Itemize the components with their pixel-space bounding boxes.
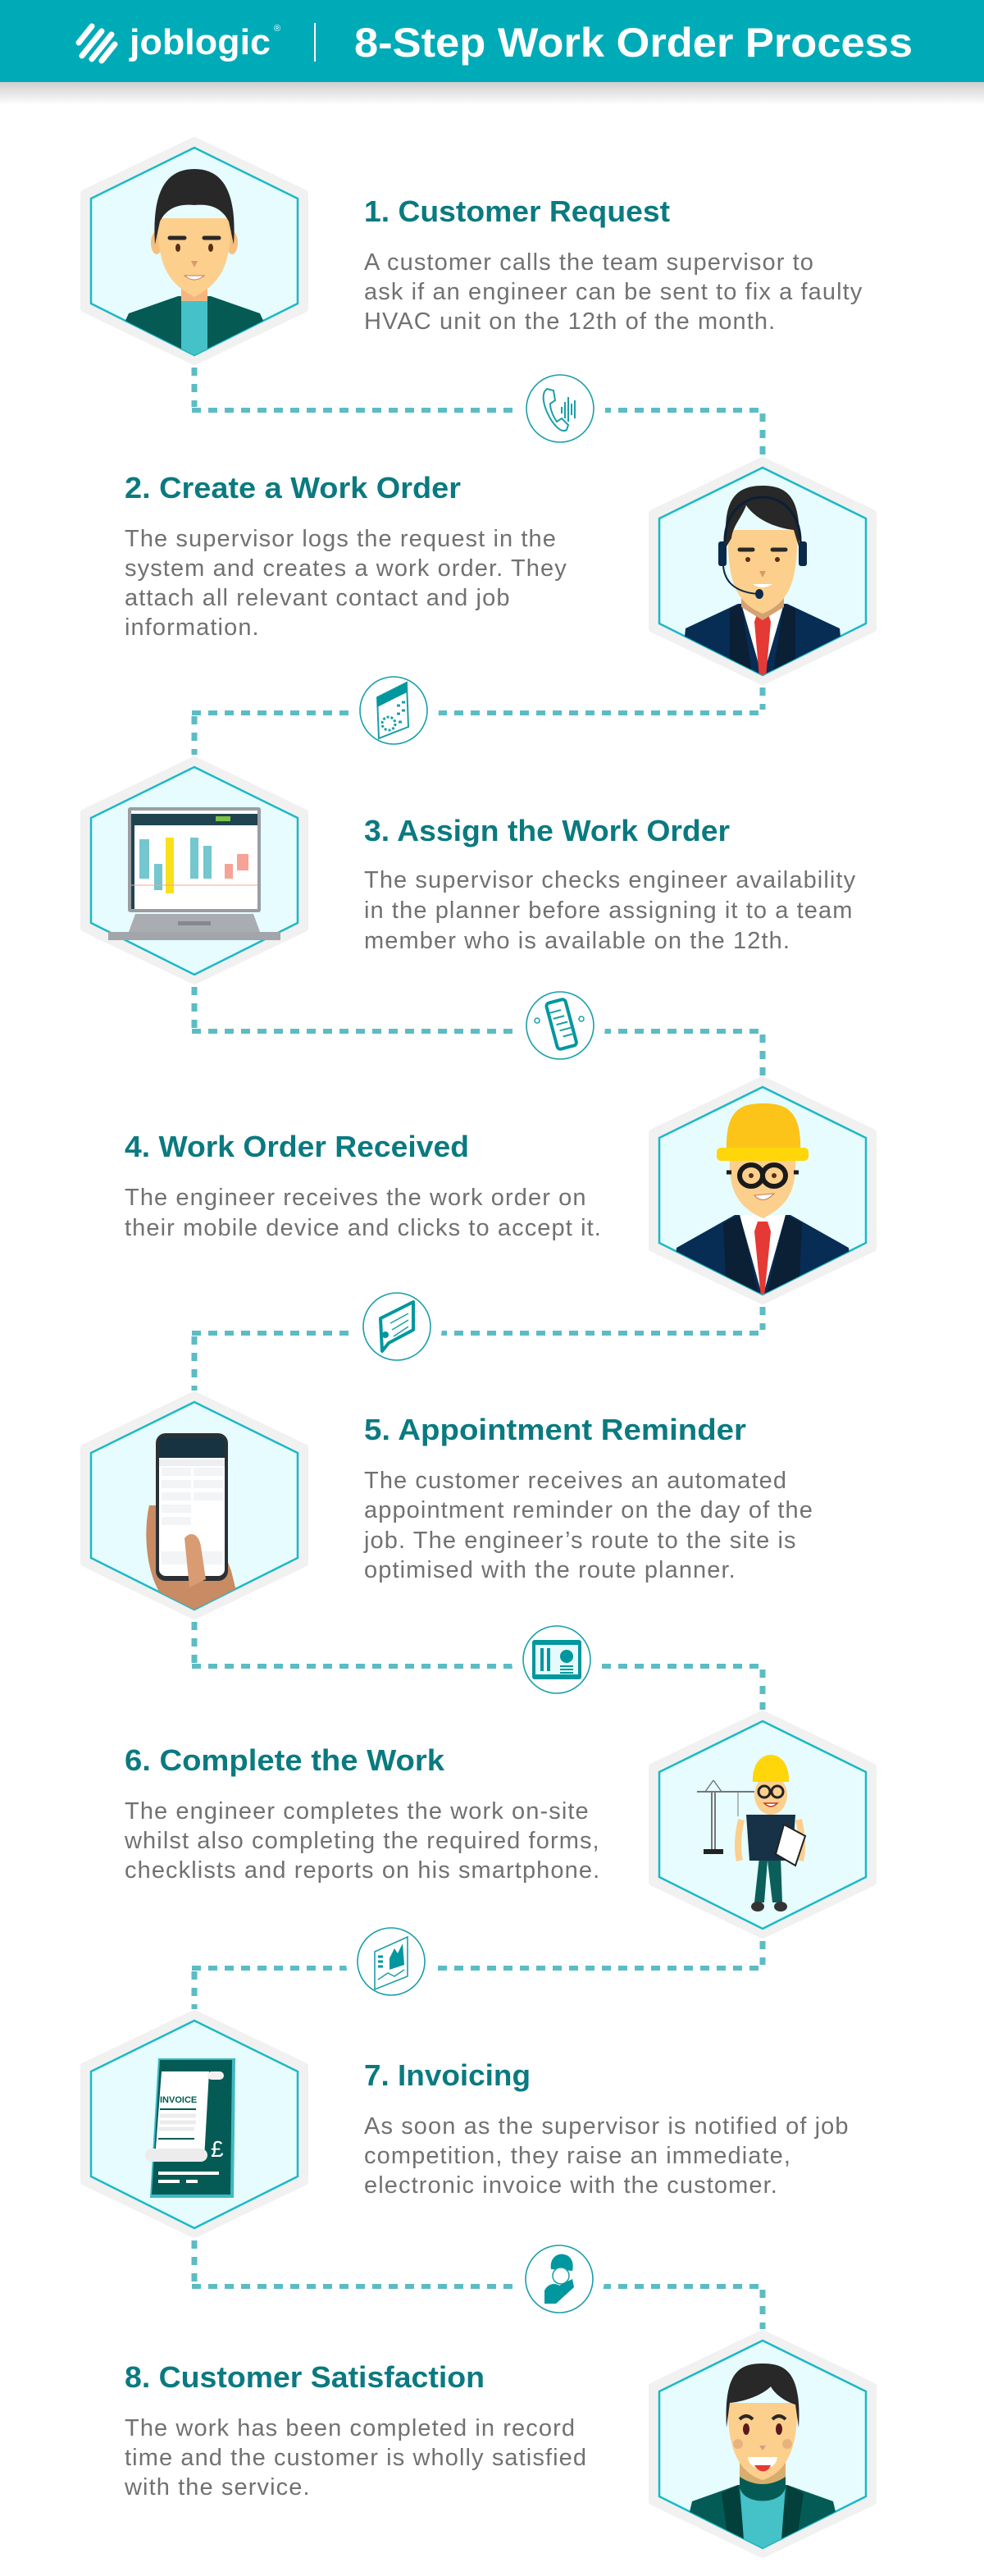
step 5 hexagon: hand with phone <box>84 1395 304 1620</box>
icon circle 2: calendar gear <box>348 665 439 756</box>
step 4 text: The engineer receives the work order on <box>125 1185 587 1211</box>
step 6 text: checklists and reports on his smartphone. <box>125 1857 600 1884</box>
step 6 hexagon: engineer on site with crane <box>653 1715 872 1934</box>
step 2 hexagon: supervisor with headset <box>653 461 872 681</box>
step 3 text: The supervisor checks engineer availability <box>364 867 856 893</box>
step 6 text: whilst also completing the required forms, <box>124 1828 600 1854</box>
step 1 hexagon: customer <box>84 141 304 362</box>
step 3 title: 3. Assign the Work Order <box>364 814 730 847</box>
step 5 title: 5. Appointment Reminder <box>364 1413 746 1446</box>
step 8 text: The work has been completed in record <box>125 2415 576 2441</box>
step 4 text: their mobile device and clicks to accept it. <box>125 1215 602 1241</box>
icon circle 1: phone call <box>515 363 605 454</box>
connectors <box>192 368 766 2329</box>
step 4 title: 4. Work Order Received <box>125 1130 469 1163</box>
icon: joblogic logo mark <box>79 26 115 61</box>
step 2 text: information. <box>125 614 260 641</box>
icon circle 7: worker satisfaction <box>514 2234 604 2324</box>
step 1 text: A customer calls the team supervisor to <box>364 249 814 276</box>
icon circle 3: mobile checklist <box>515 980 605 1071</box>
step 8 text: time and the customer is wholly satisfied <box>125 2445 587 2471</box>
step 7 title: 7. Invoicing <box>364 2058 531 2092</box>
header bar <box>0 0 984 105</box>
step 3 text: member who is available on the 12th. <box>364 928 790 954</box>
step 3 text: in the planner before assigning it to a team <box>364 897 854 924</box>
step 7 hexagon: invoice phone: £ <box>211 2136 224 2162</box>
step 8 hexagon: satisfied customer <box>653 2334 872 2554</box>
step 1 text: HVAC unit on the 12th of the month. <box>364 308 776 335</box>
title: 8-Step Work Order Process <box>354 20 913 66</box>
step 5 text: The customer receives an automated <box>364 1468 787 1494</box>
step 7 text: electronic invoice with the customer. <box>364 2172 778 2199</box>
step 7 text: competition, they raise an immediate, <box>364 2143 791 2169</box>
step 3 hexagon: laptop planner <box>84 760 304 980</box>
step 5 text: appointment reminder on the day of the <box>364 1497 813 1523</box>
step 5 text: job. The engineer’s route to the site is <box>363 1528 797 1554</box>
header bar: ® <box>274 24 280 34</box>
icon circle 6: report chart <box>346 1916 436 2007</box>
step 7 text: As soon as the supervisor is notified of job <box>364 2113 850 2140</box>
step 1 text: ask if an engineer can be sent to fix a faulty <box>364 279 863 305</box>
step 7 hexagon: invoice phone: INVOICE <box>160 2095 197 2105</box>
step 1 title: 1. Customer Request <box>364 194 670 228</box>
step 2 title: 2. Create a Work Order <box>125 471 461 505</box>
step 6 title: 6. Complete the Work <box>125 1743 445 1777</box>
step 4 hexagon: engineer with hard hat <box>653 1080 872 1300</box>
step 8 text: with the service. <box>124 2474 311 2501</box>
icon circle 4: message card <box>352 1281 442 1372</box>
step 2 text: The supervisor logs the request in the <box>125 526 557 552</box>
step 8 title: 8. Customer Satisfaction <box>125 2360 485 2394</box>
step 2 text: system and creates a work order. They <box>125 555 567 582</box>
icon circle 5: tablet with tools <box>512 1615 602 1705</box>
step 2 text: attach all relevant contact and job <box>125 585 511 611</box>
step 6 text: The engineer completes the work on-site <box>125 1798 590 1825</box>
logo text: joblogic <box>129 22 271 62</box>
step 7 hexagon: invoice phone <box>84 2014 304 2234</box>
step 5 text: optimised with the route planner. <box>364 1557 736 1583</box>
